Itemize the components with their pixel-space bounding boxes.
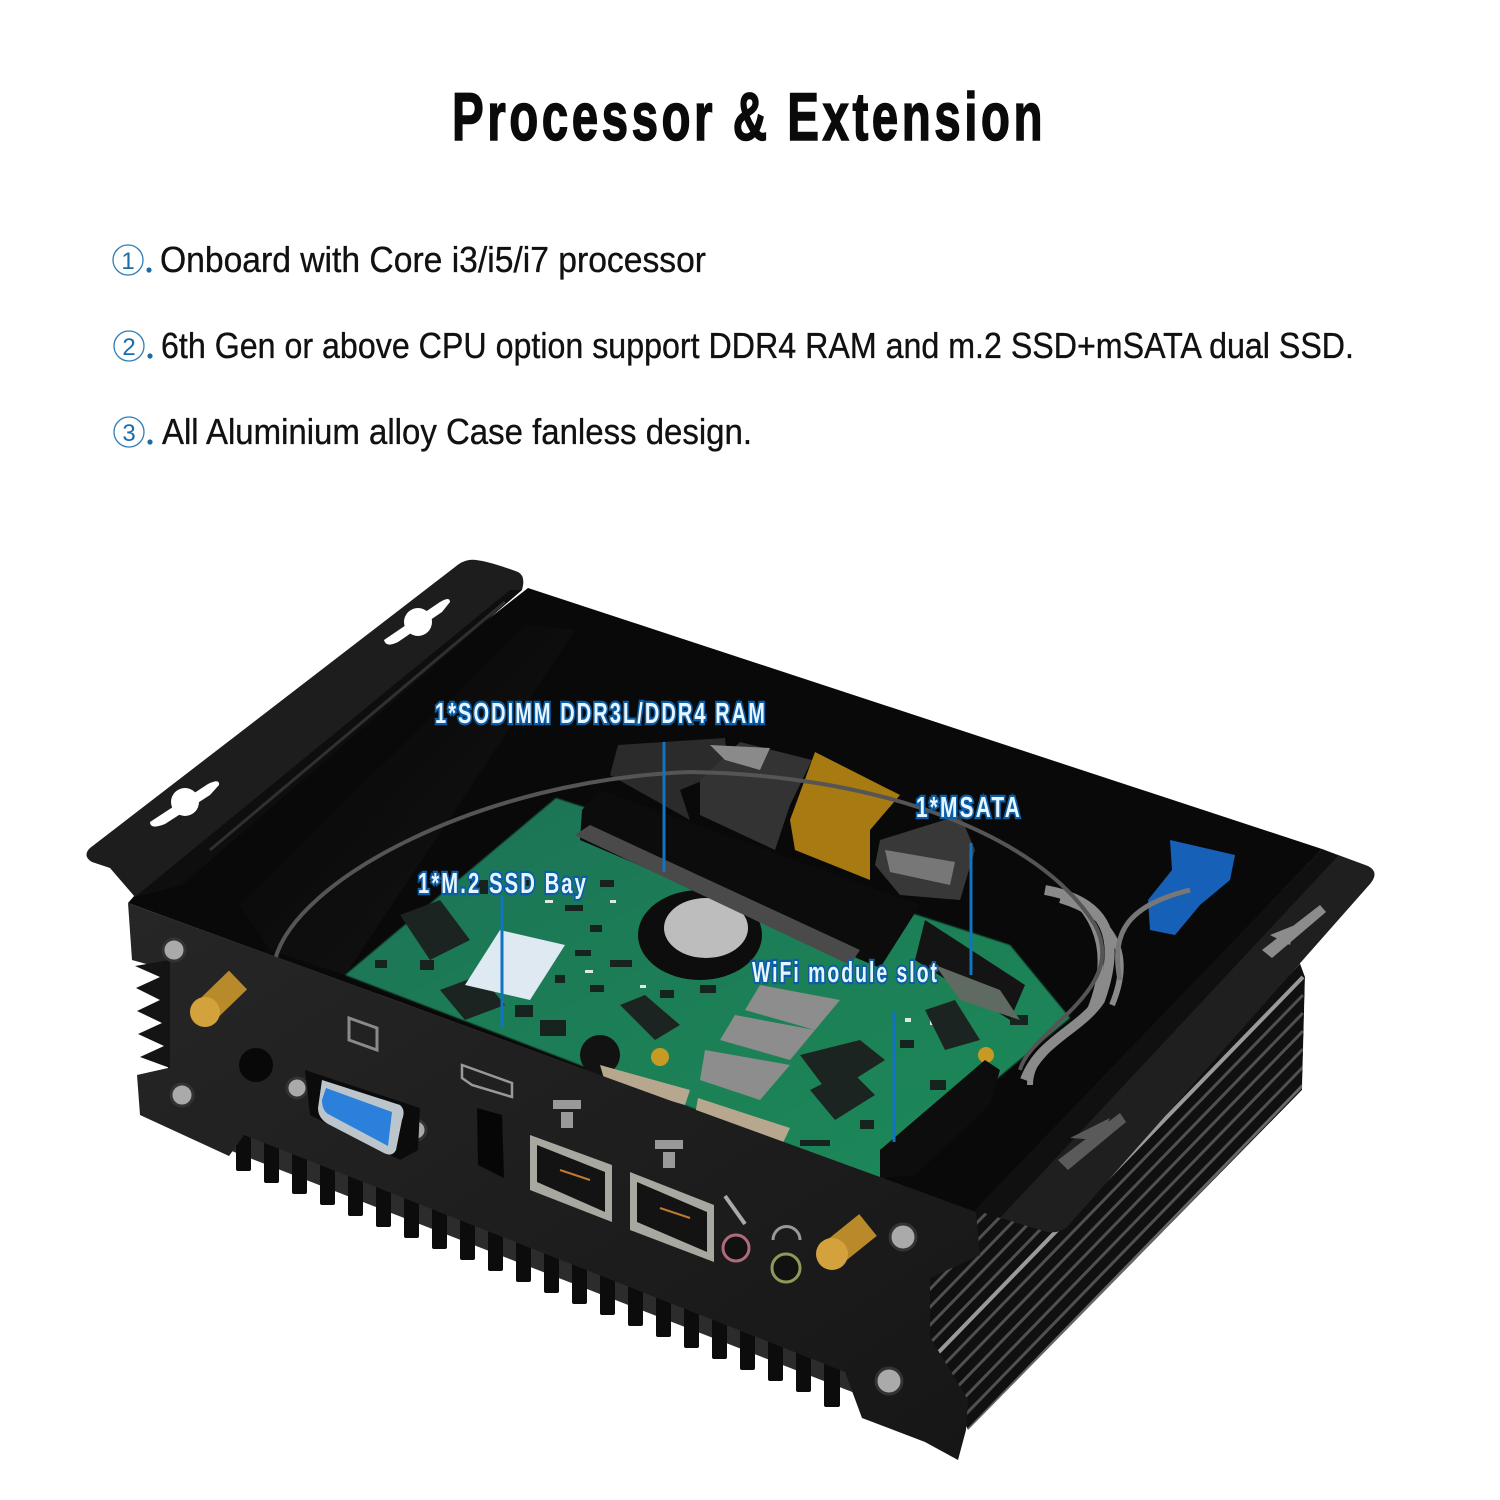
feature 1: 1 <box>121 248 135 275</box>
right mounting flange <box>975 849 1375 1232</box>
thermal sticker <box>465 930 565 1000</box>
title: Processor & Extension <box>452 79 1046 155</box>
SMA antenna connector <box>816 1225 868 1270</box>
microphone jack <box>723 1235 749 1261</box>
power jack <box>239 1048 273 1082</box>
circuit board <box>345 798 1070 1180</box>
RAM slot <box>575 790 920 968</box>
chokes <box>700 985 840 1100</box>
left inner wall <box>240 625 575 975</box>
antenna cable <box>275 772 1102 1070</box>
ribbon wires <box>1025 890 1190 1085</box>
callout: M.2 SSD: 1*M.2 SSD Bay <box>418 868 588 900</box>
feature 2: 2 <box>122 334 136 361</box>
mSATA slot <box>915 920 1025 1020</box>
callout: WiFi slot: WiFi module slot <box>752 957 939 989</box>
left mounting flange <box>86 560 523 897</box>
board texture <box>375 880 1028 1146</box>
SMA antenna connector <box>190 980 238 1027</box>
HDMI icon <box>462 1065 512 1097</box>
feature list <box>113 239 1354 452</box>
right side heat sink <box>930 963 1305 1430</box>
blue terminal block <box>1148 840 1235 935</box>
network port 2 <box>630 1172 714 1262</box>
feature 3: 3 <box>122 420 136 447</box>
HDMI port <box>477 1108 504 1178</box>
screws <box>163 939 916 1394</box>
brass standoffs <box>651 1047 994 1066</box>
network icons <box>553 1100 683 1168</box>
interior back walls <box>128 588 1322 1212</box>
keyhole slot <box>384 599 450 645</box>
WiFi slot <box>880 1060 1000 1178</box>
callout: mSATA: 1*MSATA <box>916 792 1022 824</box>
headphone icon <box>773 1226 800 1240</box>
board connectors strip <box>600 1065 790 1145</box>
VGA port <box>305 1070 420 1160</box>
gold tape <box>790 752 900 880</box>
feature 1: Onboard with Core i3/i5/i7 processor <box>160 239 706 280</box>
battery holder <box>638 890 762 980</box>
bottom heat sink fins <box>229 1115 860 1407</box>
keyhole slot <box>150 781 219 827</box>
front panel <box>128 903 980 1460</box>
USB ports <box>610 738 975 900</box>
VGA icon <box>349 1018 377 1050</box>
left fin teeth <box>135 960 170 1068</box>
keyhole slot <box>1262 905 1326 958</box>
feature 2: 6th Gen or above CPU option support DDR4 RAM and m.2 SSD+mSATA dual SSD. <box>161 325 1354 366</box>
keyhole slot <box>1058 1113 1126 1170</box>
mini PC device <box>86 560 1375 1500</box>
buzzer <box>580 1035 620 1075</box>
network port 1 <box>530 1135 612 1222</box>
callout: RAM slot: 1*SODIMM DDR3L/DDR4 RAM <box>435 698 767 730</box>
microphone icon <box>725 1196 745 1224</box>
board chips <box>400 900 980 1120</box>
feature 3: All Aluminium alloy Case fanless design. <box>162 411 752 452</box>
audio jack <box>772 1254 800 1282</box>
